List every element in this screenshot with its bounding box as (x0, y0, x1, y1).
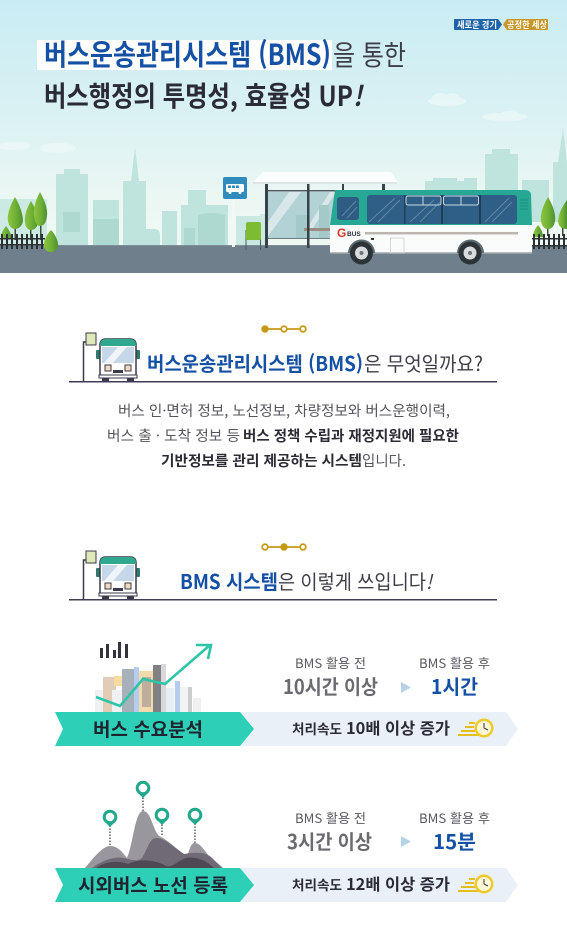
arrow (401, 836, 411, 847)
panel: intercity bus route registration (55, 782, 518, 902)
after label and value (419, 653, 490, 700)
speed increase text: 10배 이상 증가 (346, 715, 450, 739)
title (37, 32, 406, 115)
icon: bus shelter (253, 172, 397, 248)
text: G BUS logo: G (337, 226, 346, 240)
icon: bus front with stop sign 1 (84, 333, 140, 381)
heading: what is BMS (147, 348, 483, 377)
text block: BMS description (107, 400, 459, 471)
heading: what is BMS: 버스운송관리시스템 (BMS) (147, 348, 363, 377)
clouds (0, 93, 528, 153)
speed increase text (292, 871, 450, 895)
before label and value (287, 808, 372, 855)
text block: BMS description: 기반정보를 관리 제공하는 시스템 (161, 450, 362, 471)
after label and value: BMS 활용 후 (419, 808, 490, 827)
heading: how BMS is used (180, 566, 433, 595)
speed increase text: 처리속도 (292, 874, 342, 894)
after label and value: 15분 (433, 826, 476, 855)
text block: BMS description: 버스 출 · 도착 정보 등 (107, 425, 240, 446)
icon: mountain map pins (85, 782, 223, 868)
slogan badge: 새로운 경기 (457, 18, 497, 31)
after label and value: BMS 활용 후 (419, 653, 490, 672)
icon: green city bus (330, 190, 532, 264)
heading: what is BMS: 은 무엇일까요? (364, 348, 483, 377)
slogan badge: 공정한 세상 (507, 18, 548, 31)
speed increase text: 처리속도 (292, 718, 342, 738)
panel: bus demand analysis (55, 642, 518, 746)
icon: city growth chart (95, 642, 211, 712)
panel: hero street scene (0, 0, 567, 273)
icon: route step indicator 2 (262, 544, 306, 550)
before label and value: 3시간 이상 (287, 826, 372, 855)
title: 버스운송관리시스템 (BMS) (44, 32, 331, 74)
before label and value: 10시간 이상 (283, 671, 378, 700)
after label and value (419, 808, 490, 855)
text block: BMS description: 입니다. (362, 450, 406, 471)
text block: BMS description: 버스 정책 수립과 재정지원에 필요한 (243, 425, 459, 446)
heading: how BMS is used: 은 이렇게 쓰입니다! (278, 566, 433, 595)
text: G BUS logo (337, 226, 361, 240)
road (0, 245, 567, 273)
arrow (401, 682, 411, 693)
speed increase text (292, 715, 450, 739)
category ribbon (55, 712, 254, 746)
category ribbon: 시외버스 노선 등록 (78, 871, 228, 898)
slogan badge (454, 18, 548, 31)
comparison ribbon background (240, 712, 518, 746)
before label and value: BMS 활용 전 (295, 808, 366, 827)
skyline buildings (0, 128, 567, 245)
category ribbon: 버스 수요분석 (93, 715, 203, 742)
icon: green trash bin (246, 222, 261, 250)
icon: route step indicator 1 (262, 326, 306, 332)
icon: bus stop sign (223, 177, 247, 247)
icon: fast clock (458, 718, 494, 738)
text: G BUS logo: BUS (347, 231, 361, 238)
icon: right trees and fence (532, 197, 567, 249)
before label and value (283, 653, 378, 700)
text block: BMS description: 버스 인·면허 정보, 노선정보, 차량정보와 버스운행이력, (118, 400, 450, 421)
comparison ribbon background (240, 868, 518, 902)
speed increase text: 12배 이상 증가 (346, 871, 450, 895)
icon: fast clock (458, 874, 494, 894)
title: 을 통한 (333, 34, 406, 74)
heading: how BMS is used: BMS 시스템 (180, 566, 278, 595)
category ribbon (55, 868, 254, 902)
title: 버스행정의 투명성, 효율성 UP! (44, 75, 364, 115)
icon: left trees and fence (0, 192, 58, 252)
before label and value: BMS 활용 전 (295, 653, 366, 672)
icon: bus front with stop sign 2 (84, 551, 140, 599)
after label and value: 1시간 (431, 671, 478, 700)
